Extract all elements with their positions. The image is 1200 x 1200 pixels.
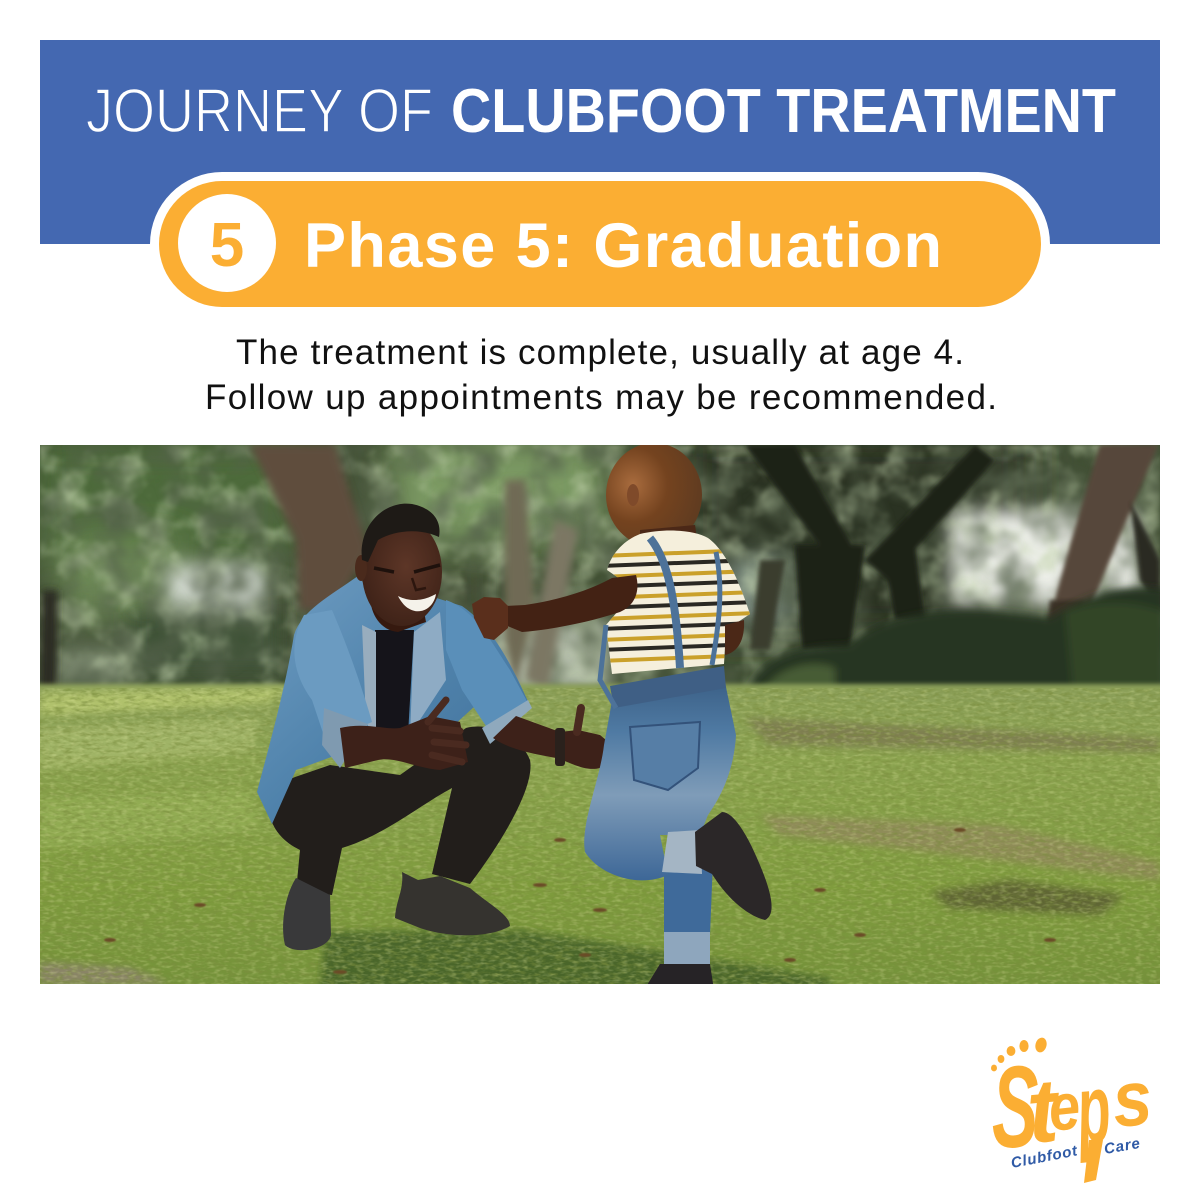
man shirt <box>257 576 530 824</box>
logo: Steps wordmark: t <box>1023 1060 1066 1163</box>
child striped shirt <box>606 530 750 674</box>
child suspenders <box>600 538 720 708</box>
title: JOURNEY OF <box>86 77 433 146</box>
logo: Clubfoot tagline: Clubfoot <box>1010 1142 1080 1172</box>
man left forearm and hand <box>340 700 468 770</box>
photo: father and child in park <box>30 435 1170 994</box>
man watch <box>555 728 565 766</box>
child raised shoe <box>695 812 772 920</box>
man right sleeve <box>446 600 528 732</box>
child bottom shoe <box>648 964 713 984</box>
man right shoe <box>395 872 510 935</box>
title <box>86 77 1116 146</box>
child overalls <box>584 668 736 880</box>
photo foreground detail: fallen leaves <box>104 828 1056 974</box>
child figure <box>472 443 772 990</box>
man black tee <box>374 630 414 735</box>
phase number badge: 5 <box>210 211 244 280</box>
Steps Clubfoot Care logo <box>991 1036 1155 1183</box>
man arm sleeve left <box>294 610 372 742</box>
logo: foot toes <box>991 1036 1048 1071</box>
logo: Steps wordmark: S <box>992 1043 1038 1172</box>
phase number badge <box>178 194 276 292</box>
logo: Steps wordmark: s <box>1109 1053 1155 1144</box>
photo ground: grass lawn <box>30 684 1170 994</box>
man trousers <box>269 727 531 895</box>
logo: Steps wordmark: e <box>1045 1069 1084 1145</box>
header banner <box>40 40 1160 244</box>
child arm and hand <box>472 575 637 640</box>
logo: Steps wordmark <box>992 1043 1155 1183</box>
man hair <box>362 504 440 562</box>
child back leg <box>664 835 714 935</box>
title: CLUBFOOT TREATMENT <box>451 77 1116 146</box>
man figure <box>257 504 612 950</box>
man left shoe <box>283 878 331 950</box>
logo: Care tagline: Care <box>1103 1135 1141 1158</box>
child rolled cuff <box>662 830 702 874</box>
man neck and head <box>371 606 426 632</box>
man right forearm and hand <box>493 708 612 769</box>
description text: Follow up appointments may be recommended. <box>205 378 997 417</box>
phase pill <box>150 172 1050 316</box>
phase heading: Phase 5: Graduation <box>304 211 942 281</box>
logo: Steps wordmark: p <box>1071 1053 1115 1164</box>
description text <box>205 333 997 417</box>
man smile <box>398 594 436 611</box>
photo background: trees and hedge <box>40 445 1160 687</box>
description text: The treatment is complete, usually at age 4. <box>236 333 964 372</box>
child head <box>606 443 702 547</box>
